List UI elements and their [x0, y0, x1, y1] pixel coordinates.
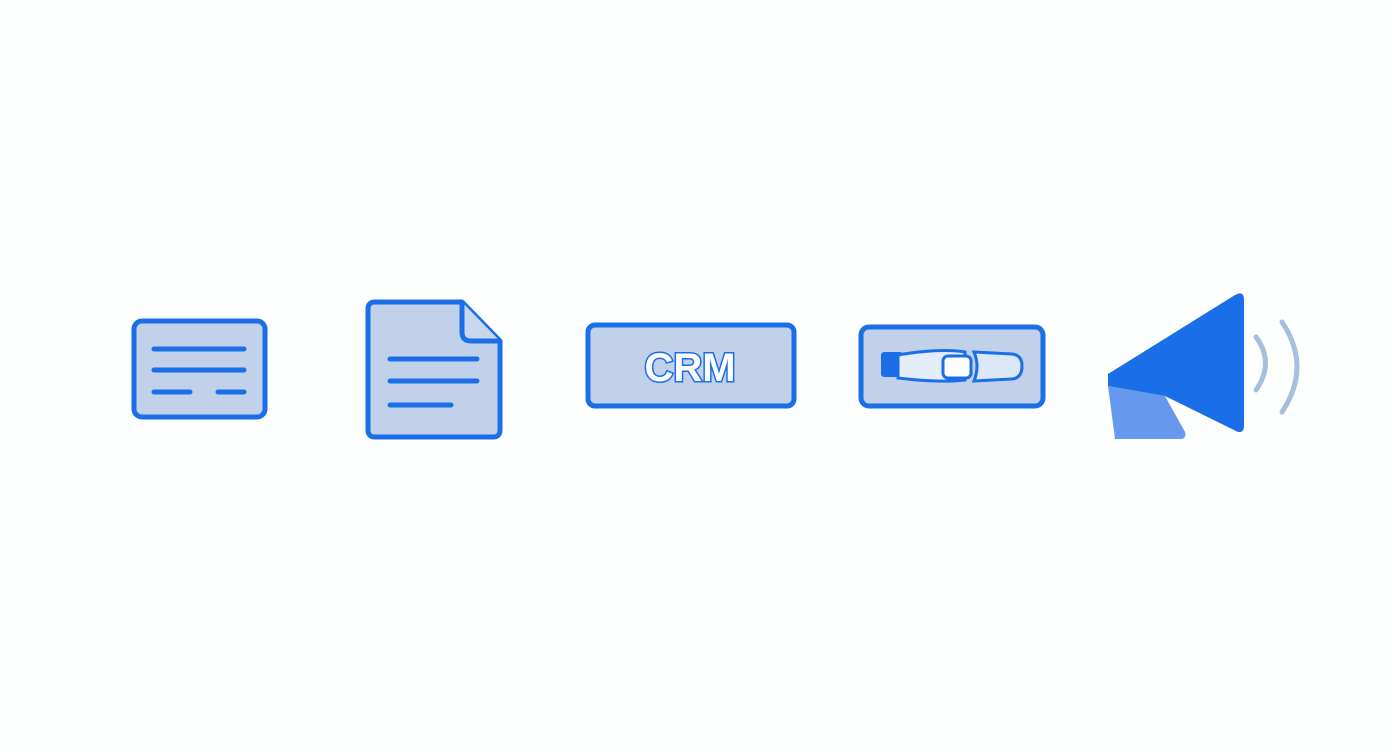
icon: CRM box: [588, 325, 794, 406]
icon: megaphone: [1108, 293, 1297, 439]
icon: document: [368, 302, 500, 437]
icon: car box: [861, 327, 1043, 406]
icon: card with text lines: [134, 321, 265, 417]
icon: CRM box: CRM: [644, 346, 736, 390]
